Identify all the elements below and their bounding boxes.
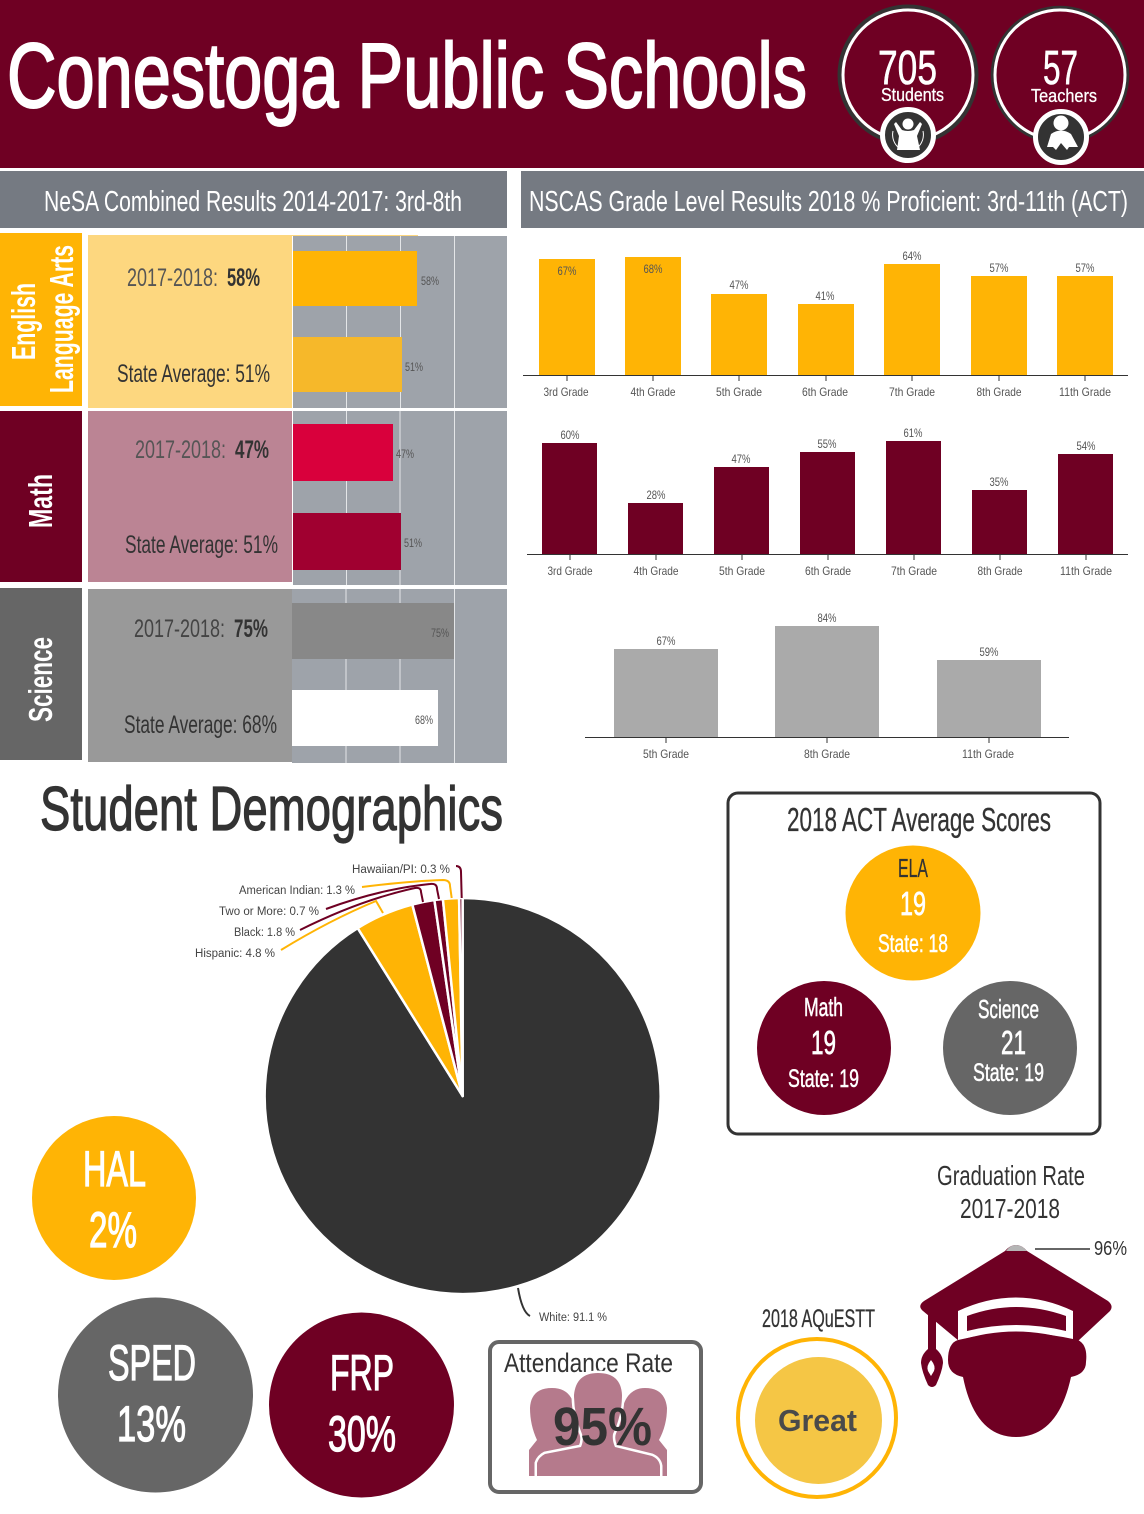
panel: Science: 68% — [415, 713, 433, 727]
bar chart: Math by grade: 35% — [990, 475, 1009, 489]
bar chart: ELA by grade: 64% — [902, 249, 922, 263]
label: Science: Science — [22, 637, 59, 722]
bar: 2017-2018 — [293, 424, 393, 481]
bar chart: Math by grade: 11th Grade — [1060, 564, 1112, 578]
circle: ELA: 19 — [900, 885, 926, 922]
graduation rate heading: Graduation Rate — [937, 1160, 1085, 1191]
circle: FRP — [269, 1312, 454, 1498]
bar chart: ELA by grade: 5th Grade — [716, 385, 762, 399]
bar chart: Math by grade: 3rd Grade — [548, 564, 593, 578]
circle: Math — [757, 981, 891, 1115]
section header: NSCAS results — [521, 171, 1144, 228]
circle: HAL — [32, 1116, 196, 1280]
AQuESTT rating: 2018 AQuESTT — [762, 1305, 875, 1333]
panel: Math: 47% — [396, 447, 414, 461]
stat: teachers — [992, 8, 1128, 162]
panel: 2018 ACT average scores — [728, 793, 1100, 1134]
panel: Math — [0, 411, 507, 585]
pie chart: demographics: American Indian: 1.3 % — [239, 885, 355, 897]
panel: Science: State Average: 68% — [124, 711, 277, 739]
bar: state average — [293, 337, 402, 392]
bar chart: ELA by grade: 4th Grade — [630, 385, 676, 399]
pie chart: demographics: Hawaiian/PI: 0.3 % — [352, 864, 450, 876]
circle: Science: 21 — [1001, 1024, 1026, 1061]
bar chart: ELA by grade: 11th Grade — [1059, 385, 1111, 399]
label: English Language Arts — [5, 245, 80, 393]
bar chart: ELA by grade: 41% — [816, 289, 835, 303]
panel: English Language Arts: State Average: 51% — [117, 360, 270, 388]
heading: Student Demographics: Student Demographics — [40, 775, 503, 844]
pie chart: demographics: Hispanic: 4.8 % — [195, 948, 275, 960]
panel: English Language Arts: 2017-2018: — [127, 264, 218, 292]
circle: Math: State: 19 — [788, 1065, 859, 1093]
bar chart: ELA by grade: 3rd Grade — [544, 385, 589, 399]
bar chart: ELA by grade — [523, 249, 1128, 399]
bar chart: Science by grade: 11th Grade — [962, 747, 1014, 761]
bar chart: Science by grade: 67% — [656, 634, 676, 648]
pie chart: demographics — [195, 864, 661, 1324]
bar chart: Math by grade: 60% — [560, 428, 580, 442]
bar: 2017-2018 — [292, 603, 454, 659]
panel: Math: 47% — [235, 436, 269, 464]
bar chart: Math by grade: 7th Grade — [891, 564, 937, 578]
icon: student with raised arms — [882, 110, 934, 160]
pie chart: demographics: Black: 1.8 % — [234, 927, 295, 939]
bar chart: Math by grade: 54% — [1076, 439, 1096, 453]
circle: SPED: SPED — [108, 1335, 196, 1391]
bar chart: Science by grade: 59% — [980, 645, 999, 659]
bar chart: ELA by grade: 57% — [1076, 261, 1095, 275]
panel: attendance rate: 95% — [553, 1397, 652, 1457]
panel: Math: 2017-2018: — [135, 436, 226, 464]
bar chart: Math by grade: 5th Grade — [719, 564, 765, 578]
stat: teachers: 57 — [1043, 42, 1078, 95]
stat: students: 705 — [878, 42, 937, 95]
bar chart: Math by grade: 61% — [904, 426, 923, 440]
header banner — [0, 0, 1144, 168]
icon: graduate silhouette, 96% — [920, 1238, 1127, 1437]
icon: graduate silhouette, 96%: 96% — [1094, 1238, 1127, 1260]
circle: ELA — [846, 846, 980, 980]
stat: teachers: Teachers — [1031, 86, 1097, 106]
graduation rate heading — [937, 1160, 1085, 1224]
bar chart: Math by grade — [527, 426, 1128, 578]
panel: attendance rate: Attendance Rate — [504, 1348, 673, 1378]
circle: Science — [943, 981, 1077, 1115]
icon: teacher with book — [1036, 112, 1086, 162]
label: Math: Math — [22, 474, 59, 528]
panel: English Language Arts — [0, 233, 507, 408]
bar chart: Math by grade: 55% — [818, 437, 837, 451]
label: English Language Arts: English — [5, 283, 42, 360]
bar chart: Math by grade: 6th Grade — [805, 564, 851, 578]
icon: people group — [529, 1373, 667, 1476]
circle: SPED: 13% — [117, 1396, 186, 1452]
bar chart: ELA by grade: 8th Grade — [976, 385, 1022, 399]
pie chart: demographics: Two or More: 0.7 % — [219, 906, 319, 918]
circle: FRP: FRP — [330, 1345, 394, 1401]
stat: students — [840, 6, 976, 160]
bar chart: Math by grade: 8th Grade — [978, 564, 1023, 578]
pie chart: demographics: White: 91.1 % — [539, 1312, 607, 1324]
bar chart: ELA by grade: 67% — [558, 264, 577, 278]
panel: Math: 51% — [404, 536, 422, 550]
bar chart: Math by grade: 47% — [732, 452, 751, 466]
bar chart: ELA by grade: 7th Grade — [889, 385, 935, 399]
bar chart: Science by grade — [585, 611, 1069, 761]
bar chart: ELA by grade: 68% — [644, 262, 663, 276]
bar: 2017-2018 — [293, 251, 417, 306]
panel: English Language Arts: 58% — [227, 264, 260, 292]
bar chart: Math by grade: 4th Grade — [634, 564, 679, 578]
graduation rate heading: 2017-2018 — [960, 1193, 1060, 1224]
panel: English Language Arts: 51% — [405, 360, 423, 374]
panel: English Language Arts: 58% — [421, 274, 439, 288]
circle: ELA: ELA — [898, 853, 928, 883]
circle: HAL: 2% — [89, 1202, 137, 1258]
bar chart: Science by grade: 84% — [818, 611, 837, 625]
bar chart: Science by grade: 5th Grade — [643, 747, 689, 761]
circle: ELA: State: 18 — [878, 930, 948, 958]
circle: HAL: HAL — [83, 1141, 146, 1197]
panel: Science: 75% — [431, 626, 449, 640]
bar chart: Math by grade: 28% — [646, 488, 666, 502]
circle: Math: 19 — [811, 1024, 836, 1061]
AQuESTT rating: Great — [778, 1403, 857, 1438]
section header: NeSA results: NeSA Combined Results 2014-2017: 3rd-8th — [44, 186, 462, 218]
bar chart: ELA by grade: 6th Grade — [802, 385, 848, 399]
bar chart: ELA by grade: 47% — [730, 278, 749, 292]
circle: Math: Math — [804, 992, 843, 1022]
bar: state average — [293, 513, 401, 570]
AQuESTT rating — [738, 1305, 896, 1497]
panel: Science: 75% — [234, 615, 268, 643]
panel: attendance rate — [490, 1342, 701, 1492]
bar: state average — [292, 690, 438, 746]
circle: SPED — [58, 1298, 253, 1492]
circle: FRP: 30% — [328, 1406, 396, 1462]
bar chart: ELA by grade: 57% — [990, 261, 1009, 275]
circle: Science: Science — [978, 994, 1039, 1024]
panel: Science — [0, 588, 507, 763]
label: English Language Arts: Language Arts — [43, 245, 80, 393]
bar chart: Science by grade: 8th Grade — [804, 747, 850, 761]
section header: NeSA results — [0, 171, 507, 228]
panel: Science: 2017-2018: — [134, 615, 225, 643]
stat: students: Students — [881, 85, 944, 105]
title: Conestoga Public Schools — [7, 25, 807, 127]
circle: Science: State: 19 — [973, 1059, 1044, 1087]
panel: Math: State Average: 51% — [125, 531, 278, 559]
